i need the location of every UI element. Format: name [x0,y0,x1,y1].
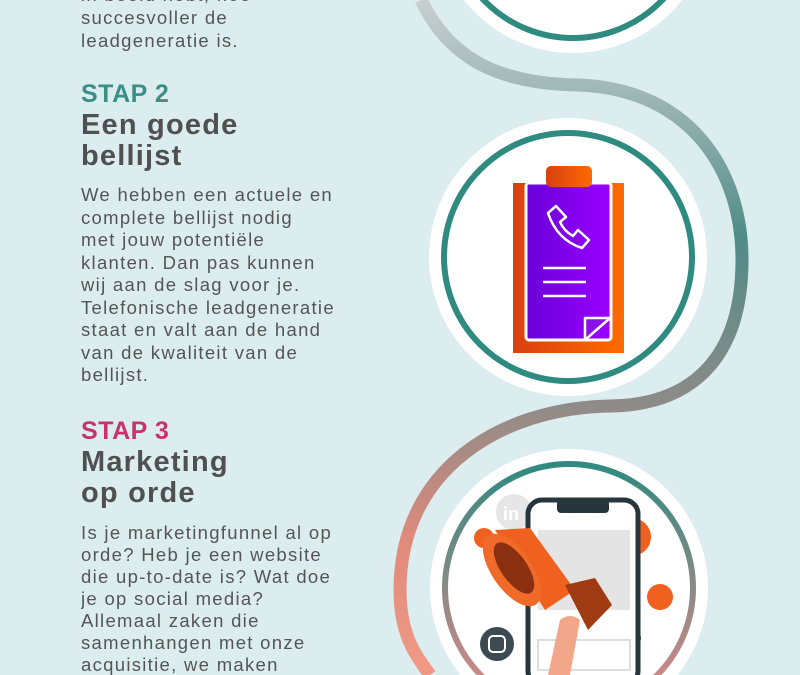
title: step 2: bellijst [81,140,182,172]
text block: step 1 tail: leadgeneratie is. [81,30,239,51]
text block: step 3: die up-to-date is? Wat doe [81,566,331,587]
title: step 2: Een goede [81,109,238,141]
heading: stap 2: STAP 2 [81,80,169,108]
text block: step 1 tail: succesvoller de [81,7,228,28]
heading: stap 3: STAP 3 [81,417,169,445]
text block: step 3: Is je marketingfunnel al op [81,522,332,543]
text block: step 1 tail [81,0,252,51]
title: step 3: Marketing [81,446,229,478]
text block: step 2: klanten. Dan pas kunnen [81,252,316,272]
text block: step 3: acquisitie, we maken [81,654,279,675]
text block: step 2: staat en valt aan de hand [81,319,321,340]
text block: step 2: met jouw potentiële [81,229,265,250]
text block: step 3: je op social media? [81,588,264,609]
circle: step 1 (partial) [434,0,712,53]
icon: phone with megaphone: in [503,504,519,524]
title: step 3: op orde [81,477,196,509]
title: step 3 [81,446,229,509]
text block: step 2: wij aan de slag voor je. [81,274,300,295]
text block: step 2: bellijst. [81,364,149,385]
text block: step 2: complete bellijst nodig [81,206,293,228]
text block: step 2: Telefonische leadgeneratie [81,296,335,318]
icon: clipboard [513,166,624,353]
text block: step 3 [81,522,332,675]
circle: step 2 [429,118,707,396]
text block: step 2: We hebben een actuele en [81,184,333,205]
icon: phone with megaphone: p [625,528,637,550]
text block: step 3: orde? Heb je een website [81,544,322,565]
text block: step 2 [81,184,335,385]
title: step 2 [81,109,238,172]
text block: step 3: Allemaal zaken die [81,610,260,631]
circle: step 3 [430,449,708,675]
path [400,0,742,675]
text block: step 3: samenhangen met onze [81,632,306,653]
text block: step 2: van de kwaliteit van de [81,342,298,362]
icon: phone with megaphone [472,494,673,675]
